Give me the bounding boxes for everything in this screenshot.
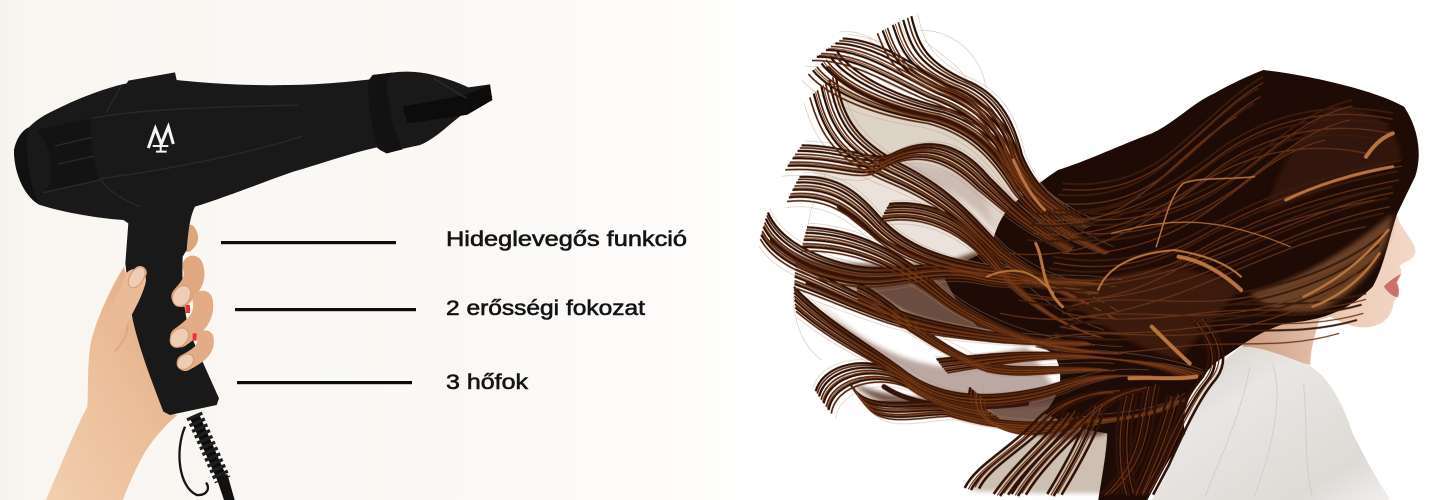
line: pointer to cold air function [221,241,396,244]
fingers wrapped around handle [117,266,206,363]
label: two power settings: 2 erősségi fokozat [446,297,645,320]
hair plume density shading [777,80,1134,493]
dryer body [14,72,492,415]
rear grill [14,127,40,205]
main thick strands [772,68,1071,407]
icon: hand holding dryer [14,72,492,500]
red indicator lights [185,305,197,341]
line: pointer to heat settings [237,381,412,384]
flowing strands dark [753,11,1214,439]
shirt [1152,347,1391,500]
hair mass [942,70,1419,500]
flowing strands copper [756,23,1201,437]
flowing strands mid brown [748,14,1211,443]
lips [1384,274,1401,297]
line: pointer to power settings [235,308,416,311]
side air vent [37,118,101,193]
fingernails [125,264,197,373]
icon: brand logo [148,127,173,153]
crown strands [1018,77,1402,340]
cord strain relief coil [179,415,235,500]
crown and face-side tonal shading [1062,107,1402,360]
hand shadow crease [115,317,128,352]
collar ring [368,73,403,153]
fingertip behind handle [187,230,193,247]
icon: woman with flowing hair [740,7,1419,500]
golden highlights [987,133,1393,378]
falling lower strand highlights [968,317,1219,495]
body seam lines [92,85,303,207]
label: three heat settings: 3 hőfok [446,371,529,394]
faint hair wisps [740,7,1220,450]
crown highlights [1000,83,1402,353]
neck and face [1241,217,1415,365]
nozzle slot [403,85,492,123]
shirt folds [1205,363,1312,497]
arm and palm [46,267,177,500]
falling lower strands [965,318,1223,496]
label: cold air function: Hideglevegős funkció [446,228,687,251]
